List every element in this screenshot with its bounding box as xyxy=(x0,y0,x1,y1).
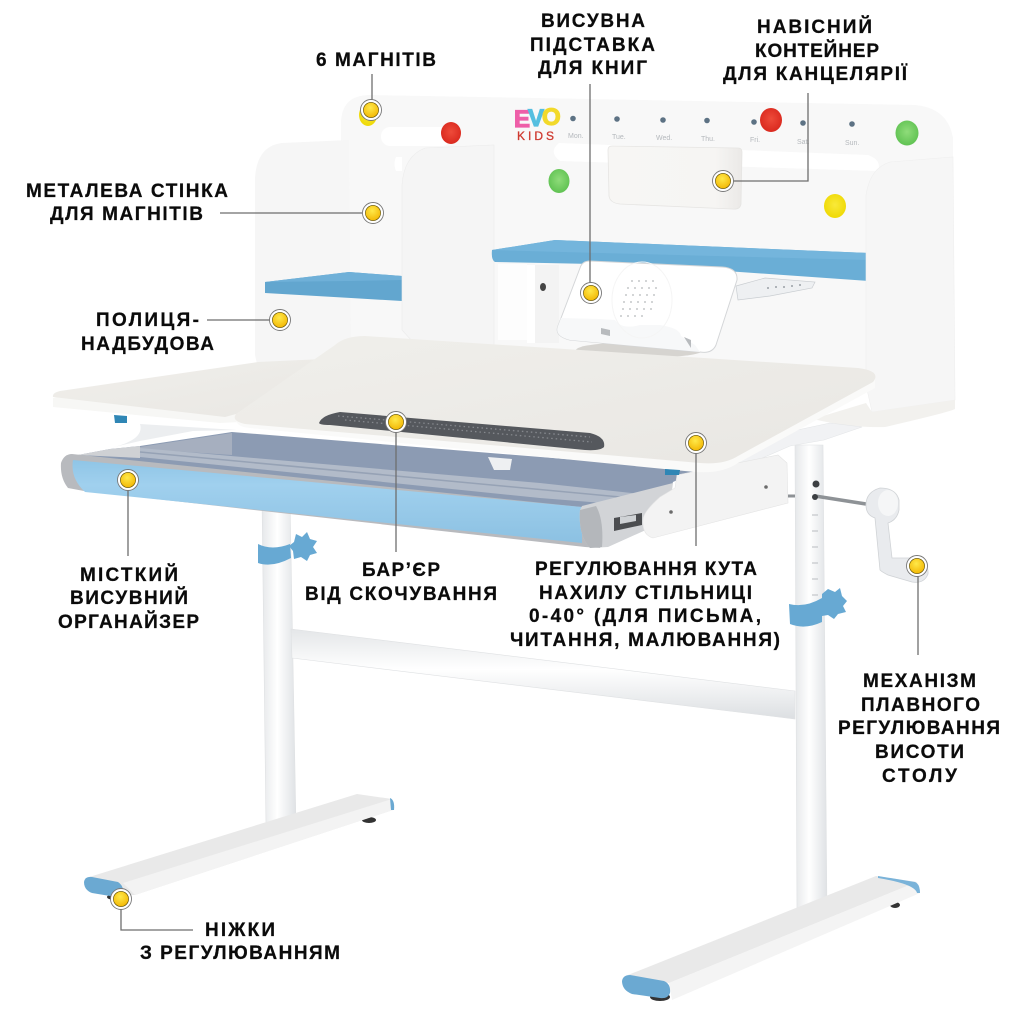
anti-roll barrier xyxy=(319,412,604,450)
label: hanging container xyxy=(723,16,908,85)
label: book stand: ПІДСТАВКА xyxy=(530,35,655,56)
book stand arm xyxy=(736,278,815,300)
left foot xyxy=(84,794,394,900)
label: organizer: ОРГАНАЙЗЕР xyxy=(58,611,199,633)
label: shelf: НАДБУДОВА xyxy=(81,334,214,355)
label: tilt adjustment xyxy=(510,559,780,651)
leader lines xyxy=(121,74,918,930)
right upright leg xyxy=(795,445,827,920)
label: hanging container: ДЛЯ КАНЦЕЛЯРІЇ xyxy=(723,64,908,85)
label: tilt adjustment: РЕГУЛЮВАННЯ КУТА xyxy=(535,559,757,580)
logo EVO KIDS: V xyxy=(528,105,544,132)
tilting tabletop xyxy=(235,336,875,472)
crank handle xyxy=(866,488,928,582)
label: book stand: ДЛЯ КНИГ xyxy=(538,58,647,79)
weekly schedule dots and labels xyxy=(568,116,859,147)
label: hanging container: КОНТЕЙНЕР xyxy=(755,40,879,62)
label: book stand: ВИСУВНА xyxy=(541,11,645,32)
label: height mechanism: ПЛАВНОГО xyxy=(861,695,980,716)
logo EVO KIDS xyxy=(514,104,561,143)
middle side panel xyxy=(402,145,494,345)
logo EVO KIDS: KIDS xyxy=(517,129,554,143)
side bracket xyxy=(643,455,788,538)
weekly schedule dots and labels: Thu. xyxy=(701,136,715,143)
drawer front roll xyxy=(61,454,620,548)
label: organizer xyxy=(58,564,199,633)
label: shelf: ПОЛИЦЯ- xyxy=(96,310,199,331)
label: metal wall: ДЛЯ МАГНІТІВ xyxy=(50,204,203,225)
label: organizer: ВИСУВНИЙ xyxy=(70,587,188,609)
label: tilt adjustment: ЧИТАННЯ, МАЛЮВАННЯ) xyxy=(510,630,780,651)
left shelf xyxy=(265,272,402,301)
crank axle xyxy=(788,480,866,504)
label: metal wall: МЕТАЛЕВА СТІНКА xyxy=(26,181,228,202)
label: tilt adjustment: 0-40° (ДЛЯ ПИСЬМА, xyxy=(529,606,761,627)
right height clamp xyxy=(789,588,847,627)
shelf bracket xyxy=(498,264,559,343)
label: height mechanism: ВИСОТИ xyxy=(875,742,964,763)
logo EVO KIDS: E xyxy=(514,106,530,133)
label: height mechanism: МЕХАНІЗМ xyxy=(863,671,976,692)
label: height mechanism: СТОЛУ xyxy=(882,766,957,787)
label: shelf xyxy=(81,310,214,355)
weekly schedule dots and labels: Tue. xyxy=(612,134,626,141)
weekly schedule dots and labels: Sun. xyxy=(845,140,859,147)
upper shelf xyxy=(492,240,869,281)
blue clip right xyxy=(665,469,680,475)
hutch backboard xyxy=(341,95,953,385)
label: anti-roll barrier xyxy=(305,560,497,605)
label: anti-roll barrier: ВІД СКОЧУВАННЯ xyxy=(305,584,497,605)
drawer interior xyxy=(78,432,700,510)
label: book stand xyxy=(530,11,655,79)
weekly schedule dots and labels: Mon. xyxy=(568,133,584,140)
hanging stationery container xyxy=(608,146,742,209)
label: adjustable feet xyxy=(140,920,340,964)
crossbar xyxy=(291,629,795,719)
blue clip left xyxy=(114,415,127,423)
label: hanging container: НАВІСНИЙ xyxy=(757,16,872,38)
label: metal wall xyxy=(26,181,228,225)
label: tilt adjustment: НАХИЛУ СТІЛЬНИЦІ xyxy=(539,583,752,604)
logo EVO KIDS: O xyxy=(542,104,561,131)
height scale markings xyxy=(812,515,818,595)
magnets xyxy=(359,104,918,218)
weekly schedule dots and labels: Wed. xyxy=(656,135,672,142)
left upright leg xyxy=(262,500,296,830)
left height clamp xyxy=(258,532,317,565)
marker pins xyxy=(110,100,928,910)
label: anti-roll barrier: БАР’ЄР xyxy=(362,560,440,581)
white frame under left tabletop xyxy=(110,424,237,448)
desk illustration xyxy=(53,95,955,1001)
label: height mechanism xyxy=(838,671,1000,787)
left side panel xyxy=(255,140,351,368)
right foot xyxy=(622,876,920,1001)
drawer end with rail xyxy=(580,483,673,548)
backboard cut-out slots xyxy=(381,127,879,171)
fixed tabletop left xyxy=(53,358,345,423)
label: organizer: МІСТКИЙ xyxy=(80,564,178,586)
right side panel xyxy=(866,157,955,412)
weekly schedule dots and labels: Fri. xyxy=(750,137,760,144)
pull-out book stand xyxy=(557,261,737,358)
tabletop side wing right xyxy=(813,400,955,427)
label: adjustable feet: НІЖКИ xyxy=(205,920,275,941)
label: 6 magnets: 6 МАГНІТІВ xyxy=(316,50,436,71)
label: adjustable feet: З РЕГУЛЮВАННЯМ xyxy=(140,943,340,964)
desk support arm xyxy=(724,423,862,470)
label: height mechanism: РЕГУЛЮВАННЯ xyxy=(838,718,1000,739)
weekly schedule dots and labels: Sat. xyxy=(797,139,810,146)
